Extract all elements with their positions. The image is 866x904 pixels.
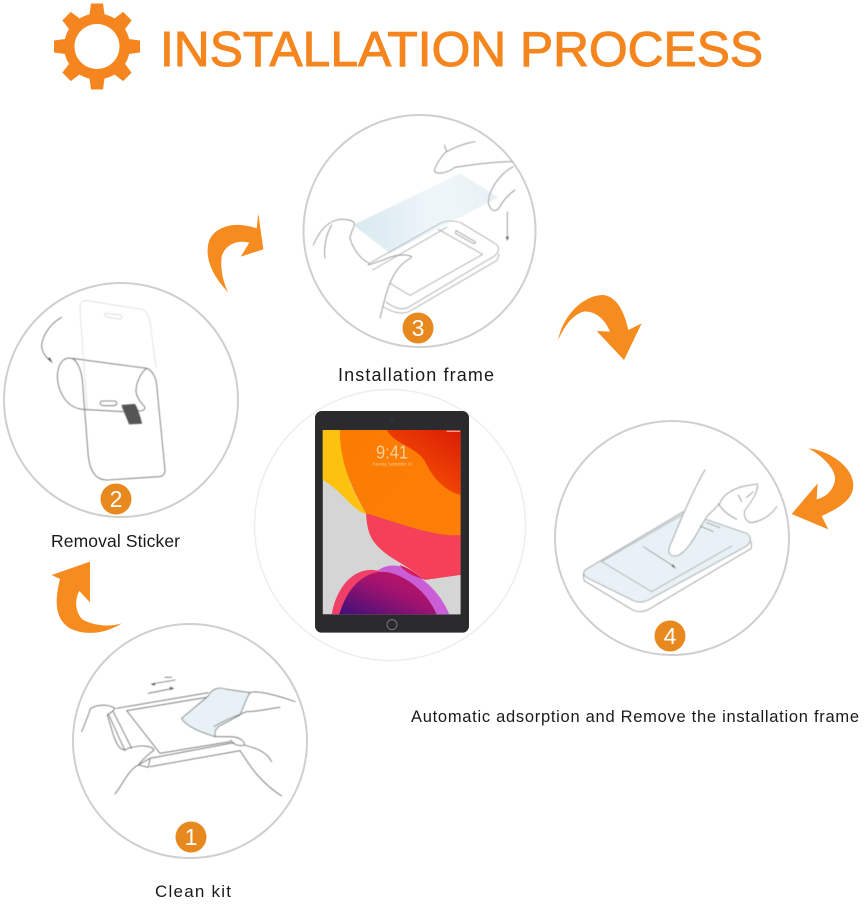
label: clean kit: Clean kit [155, 882, 231, 901]
panel: center tablet circle [254, 390, 526, 660]
panel: step 2 circle [4, 283, 238, 517]
label: removal sticker: Removal Sticker [51, 531, 180, 551]
icon: step 1 badge [176, 822, 206, 852]
panel: step 1 circle [73, 624, 307, 858]
clock date: Tuesday, September 10 [372, 462, 412, 467]
tablet illustration [315, 411, 469, 633]
panel: step 4 circle [555, 421, 789, 655]
icon: step 2 badge: 2 [110, 486, 122, 512]
icon: step 3 badge [402, 312, 434, 344]
arrow: step 1 to step 2 [52, 562, 122, 633]
icon: step 4 badge: 4 [664, 623, 677, 649]
clock time: 9:41 [376, 442, 408, 463]
step 4 illustration [583, 470, 777, 612]
step 3 illustration [313, 142, 515, 318]
label: automatic adsorption: Automatic adsorption and Remove the installation frame [411, 708, 859, 726]
icon: step 2 badge [100, 484, 132, 514]
icon: step 1 badge: 1 [185, 824, 197, 850]
icon: step 4 badge [654, 620, 686, 652]
step 2 illustration [42, 301, 165, 480]
title: INSTALLATION PROCESS [160, 23, 763, 77]
icon: gear [54, 4, 140, 90]
arrow: step 4 pointer [792, 448, 853, 529]
arrow: step 2 to step 3 [208, 213, 263, 293]
icon: step 3 badge: 3 [412, 315, 424, 341]
panel: step 3 circle [304, 115, 536, 347]
step 1 illustration [82, 677, 295, 796]
label: installation frame: Installation frame [338, 365, 494, 385]
arrow: step 3 to step 4 [558, 295, 642, 360]
